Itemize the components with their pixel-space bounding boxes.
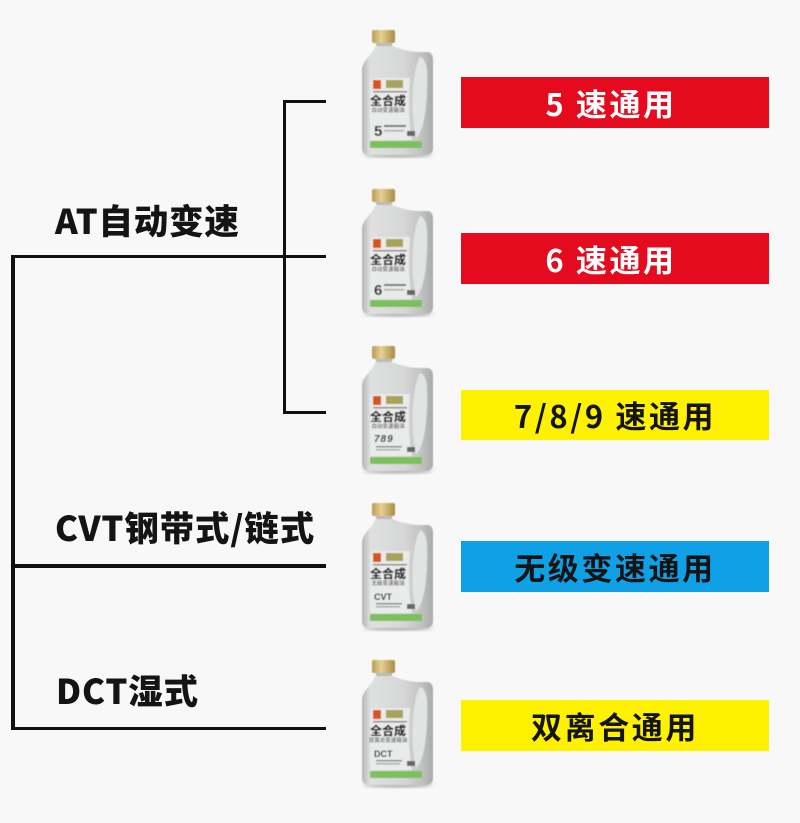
- bottle: 7/8/9 speed: 自动变速箱油: [371, 422, 405, 430]
- bottle: 6 speed: 全合成: [370, 251, 406, 268]
- bottle: CVT: CVT: [374, 592, 393, 602]
- bottle: 7/8/9 speed: 全合成: [370, 408, 406, 425]
- bottle: DCT: DCT: [374, 749, 393, 759]
- heading: DCT: DCT湿式: [56, 664, 199, 714]
- bottle: 5 speed: 自动变速箱油: [371, 106, 405, 114]
- label bar: stepless: [461, 541, 769, 592]
- bottle: CVT: 无级变速箱油: [371, 579, 405, 587]
- bottle: CVT: 全合成: [370, 565, 406, 582]
- label bar: 6 speed: 6 速通用: [545, 236, 677, 281]
- label bar: 7/8/9 speed: [461, 390, 769, 440]
- bottle: 7/8/9 speed: [362, 345, 434, 475]
- heading: AT automatic: AT自动变速: [55, 194, 240, 244]
- tree connector: main trunk and branches: [11, 100, 326, 730]
- label bar: 5 speed: [461, 77, 769, 128]
- bottle: 6 speed: 自动变速箱油: [371, 265, 405, 273]
- bottle: 5 speed: 全合成: [370, 92, 406, 109]
- bottle: 5 speed: [362, 29, 434, 159]
- bottle: DCT: 全合成: [370, 722, 406, 739]
- label bar: 6 speed: [461, 233, 769, 284]
- label bar: dual clutch: 双离合通用: [531, 703, 699, 748]
- heading: CVT: CVT钢带式/链式: [55, 501, 315, 551]
- bottle: 6 speed: 6: [374, 282, 382, 299]
- bottle: DCT: 双离合变速箱油: [369, 736, 408, 744]
- label bar: 5 speed: 5 速通用: [545, 80, 677, 125]
- bottle: 5 speed: 5: [374, 123, 382, 140]
- label bar: 7/8/9 speed: 7/8/9 速通用: [514, 392, 716, 437]
- bottle: 6 speed: [362, 188, 434, 318]
- label bar: stepless: 无级变速通用: [514, 544, 716, 589]
- bottle: 7/8/9 speed: 789: [374, 434, 394, 445]
- bottle: CVT: [362, 502, 434, 632]
- bottle: DCT: [362, 659, 434, 789]
- label bar: dual clutch: [461, 700, 769, 751]
